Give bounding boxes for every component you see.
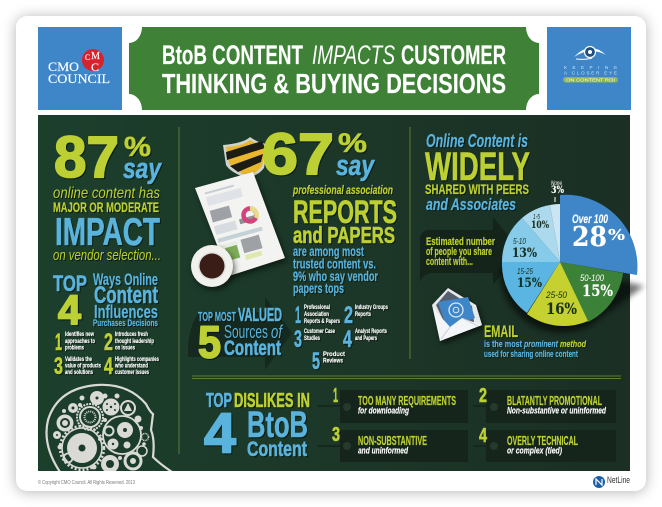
- logo text: A CLOSER EYE: [564, 70, 617, 76]
- logo panel: CMO Council: [38, 27, 122, 110]
- logo text: ON CONTENT ROI: [566, 78, 615, 83]
- panel: email note: EMAIL: [484, 322, 518, 341]
- callout text: [426, 236, 496, 268]
- label: 15-25: 15%: [517, 276, 543, 291]
- heading: ways online content influences: [93, 270, 158, 328]
- icon: CMC red seal: [82, 49, 104, 74]
- label: over 100: [572, 212, 625, 253]
- item 4: 4: [104, 353, 113, 380]
- label: 25-50: [545, 290, 577, 318]
- label: over 100: %: [608, 226, 625, 244]
- label: 15-25: 15-25: [517, 267, 533, 276]
- label: none: [551, 181, 564, 202]
- dislike 3: 3: [332, 424, 340, 446]
- heading: top 4: 4: [58, 286, 82, 334]
- text: and papers: and PAPERS: [293, 222, 395, 248]
- text: online content has: online content has: [53, 185, 160, 202]
- panel: email note: method: [560, 339, 586, 350]
- item 2: 2: [104, 329, 113, 356]
- label: none: 3%: [551, 185, 564, 196]
- panel: top 4 dislikes heading: BtoB: [247, 404, 308, 445]
- dislike 1: TOO MANY REQUIREMENTS: [358, 394, 456, 408]
- logo: NetLine: NetLine: [607, 475, 630, 485]
- dislike 2: [473, 385, 616, 423]
- source 5: Product: [323, 351, 346, 358]
- item 4: who understand: [114, 362, 148, 370]
- logo panel: Keeping a closer eye: [547, 27, 631, 110]
- heading: ways online content influences: Influences: [94, 302, 158, 322]
- panel: top 5 sources heading: Content: [224, 337, 281, 360]
- item 3: 3: [54, 353, 63, 380]
- text: major or moderate: MAJOR OR MODERATE: [53, 200, 159, 215]
- label: 1-5: 10%: [531, 220, 549, 231]
- text: on vendor selection: on vendor selection...: [53, 247, 161, 264]
- say: say: [336, 150, 375, 182]
- panel: 87 percent stat: [53, 125, 162, 264]
- item 4: customer issues: [115, 369, 149, 376]
- logo: NetLine: [593, 475, 630, 488]
- slice: 5-10: [502, 218, 560, 262]
- panel: widely shared heading: [425, 131, 530, 214]
- panel: top 4 ways: [53, 270, 159, 380]
- item 3: and solutions: [65, 369, 93, 376]
- pie chart: sharing audience size: [500, 181, 644, 333]
- panel: top 4 dislikes heading: Content: [247, 438, 307, 461]
- panel: 67 percent stat: [262, 122, 397, 296]
- arrow: estimated number callout: [420, 217, 520, 285]
- text: reports: REPORTS: [293, 194, 397, 230]
- label: 25-50: 16%: [546, 299, 577, 318]
- source 4: 4: [343, 326, 352, 353]
- callout text: Estimated number: [426, 236, 496, 248]
- source 5: [312, 348, 346, 375]
- label: 1-5: [531, 214, 549, 231]
- label: over 100: Over 100: [572, 212, 608, 226]
- label: 15-25: [517, 267, 543, 291]
- text: professional association: professional association: [292, 183, 393, 197]
- label: 1-5: 1-5: [533, 214, 540, 221]
- panel: top 5 sources heading: of: [271, 322, 283, 342]
- panel: top 4 dislikes heading: 4: [204, 402, 236, 466]
- panel: widely shared heading: Online Content is: [426, 131, 528, 151]
- slice: 15-25: [502, 262, 560, 313]
- say: say: [123, 153, 162, 185]
- icon: email envelope: [432, 288, 482, 341]
- item 4: [104, 353, 159, 380]
- slice: 1-5: [522, 205, 560, 262]
- item 1: 1: [55, 329, 62, 356]
- list: top 5 sources: [294, 302, 388, 375]
- panel: top 5 sources heading: [198, 305, 283, 368]
- callout text: content with...: [426, 256, 473, 268]
- icon: CMC red seal: C: [91, 60, 99, 74]
- label: over 100: 28: [572, 222, 607, 253]
- text: comparison note: [293, 243, 378, 296]
- slice: over 100: [560, 195, 637, 275]
- panel: top 4 dislikes heading: DISLIKES IN: [234, 390, 310, 412]
- source 3: Studies: [304, 335, 320, 342]
- item 1: Identifies new: [65, 331, 94, 338]
- source 4: and Papers: [355, 335, 377, 342]
- item 4: Highlights companies: [115, 356, 159, 363]
- dislike 2: Non-substantive or uninformed: [507, 406, 606, 416]
- dislike 2: 2: [479, 385, 487, 407]
- item 1: approaches to: [65, 338, 95, 345]
- dividers: [179, 127, 410, 454]
- dislike 3: NON-SUBSTANTIVE: [358, 434, 427, 448]
- text: comparison note: trusted content vs.: [293, 256, 376, 272]
- source 2: Reports: [355, 311, 371, 318]
- slice: none: [550, 204, 560, 262]
- text: impact: IMPACT: [55, 211, 160, 254]
- panel: widely shared heading: SHARED WITH PEERS: [425, 181, 529, 197]
- title line 1: BtoB CONTENT: [162, 40, 303, 70]
- percent sign: %: [338, 128, 367, 158]
- dislike 4: [473, 425, 616, 462]
- item 2: [104, 329, 154, 356]
- item 2: Introduces fresh: [115, 331, 148, 338]
- source 3: [294, 326, 335, 353]
- dislike 1: [317, 385, 468, 423]
- source 1: 1: [295, 302, 301, 329]
- text: comparison note: are among most: [293, 243, 364, 259]
- dislike 4: OVERLY TECHNICAL: [507, 434, 578, 448]
- icon: coffee cup: [191, 245, 233, 287]
- panel: top 4 dislikes heading: [204, 390, 310, 466]
- item 1: problems: [65, 344, 84, 352]
- source 1: Association: [304, 311, 329, 318]
- stat: 87: 87: [54, 125, 119, 190]
- label: 50-100: 50-100: [580, 273, 604, 283]
- heading: ways online content influences: Purchases Decisions: [93, 318, 158, 328]
- footer copyright: © Copyright CMO Council. All Rights Reserved. 2013: [38, 479, 135, 486]
- source 1: Reports & Papers: [304, 318, 340, 325]
- logo wordmark: [48, 59, 110, 86]
- item 3: value of products: [65, 362, 101, 370]
- panel: email note: [484, 322, 586, 360]
- icon: report document: [195, 172, 285, 276]
- text: comparison note: papers tops: [293, 280, 344, 296]
- panel: email note: prominent: [523, 339, 559, 350]
- logo wordmark: COUNCIL: [48, 71, 110, 86]
- panel: top 5 sources heading: 5: [198, 316, 221, 368]
- panel: email note: used for sharing online content: [484, 349, 579, 360]
- dislike 1: 1: [333, 385, 338, 407]
- icon: head with gears: [46, 385, 172, 473]
- item 2: thought leadership: [115, 338, 154, 345]
- icon: CMC red seal: M: [91, 50, 100, 62]
- logo text: [563, 65, 618, 83]
- source 4: [343, 326, 387, 353]
- label: 50-100: 15%: [582, 281, 613, 300]
- heading: top 4: TOP: [53, 271, 87, 296]
- main dark panel: [38, 115, 630, 471]
- logo wordmark: CMO: [48, 59, 79, 74]
- source 5: Reviews: [323, 358, 343, 364]
- heading: ways online content influences: Content: [94, 282, 158, 309]
- label: 50-100: [580, 273, 613, 300]
- dislike 3: [317, 424, 468, 462]
- source 3: 3: [294, 326, 302, 353]
- icon: striped shield: [223, 137, 268, 178]
- heading: top 4: [53, 271, 87, 334]
- dislike 3: and uninformed: [358, 446, 408, 456]
- dislike 1: for downloading: [358, 406, 409, 416]
- panel: widely shared heading: WIDELY: [425, 145, 530, 189]
- text: comparison note: 9% who say vendor: [293, 268, 378, 284]
- slice: 25-50: [527, 262, 588, 326]
- panel: top 5 sources heading: TOP MOST: [198, 310, 236, 324]
- label: 5-10: 5-10: [513, 237, 526, 246]
- callout text: of people you share: [426, 246, 492, 258]
- panel: top 5 sources heading: VALUED: [238, 305, 282, 325]
- source 2: [344, 302, 388, 329]
- item 3: Validates the: [65, 356, 92, 363]
- heading: ways online content influences: Ways Online: [93, 270, 158, 289]
- label: 25-50: 25-50: [545, 290, 567, 300]
- item 3: [54, 353, 101, 380]
- title line 1: CUSTOMER: [401, 40, 506, 70]
- panel: email note: is the most: [484, 339, 523, 350]
- source 1: [295, 302, 340, 329]
- source 2: 2: [344, 302, 353, 329]
- arrow: top 5 background: [188, 297, 292, 370]
- source 5: 5: [312, 348, 320, 375]
- title banner: [129, 27, 539, 110]
- source 4: Analyst Reports: [355, 328, 387, 335]
- label: none: None: [551, 181, 563, 187]
- percent sign: %: [124, 131, 151, 162]
- logo text: KEEPING: [564, 65, 617, 70]
- panel: top 5 sources heading: Sources: [224, 322, 268, 342]
- dislike 4: or complex (tied): [507, 446, 562, 456]
- slice: 50-100: [560, 262, 623, 322]
- label: 5-10: 13%: [512, 246, 538, 261]
- panel: top 4 dislikes heading: TOP: [206, 390, 232, 412]
- source 3: Customer Case: [304, 328, 335, 335]
- title line 1: IMPACTS: [312, 40, 395, 70]
- icon: eye: [574, 46, 606, 59]
- dislike 4: 4: [479, 425, 488, 447]
- title line 1: [162, 40, 506, 70]
- stat: 67: 67: [262, 122, 334, 187]
- source 2: Industry Groups: [355, 304, 388, 311]
- label: 5-10: [512, 237, 538, 261]
- panel: widely shared heading: and Associates: [426, 195, 516, 214]
- item 1: [55, 329, 95, 356]
- icon: CMC red seal: C: [85, 53, 90, 62]
- title line 2: THINKING & BUYING DECISIONS: [162, 68, 506, 99]
- item 2: on issues: [115, 344, 135, 352]
- source 1: Professional: [304, 304, 330, 311]
